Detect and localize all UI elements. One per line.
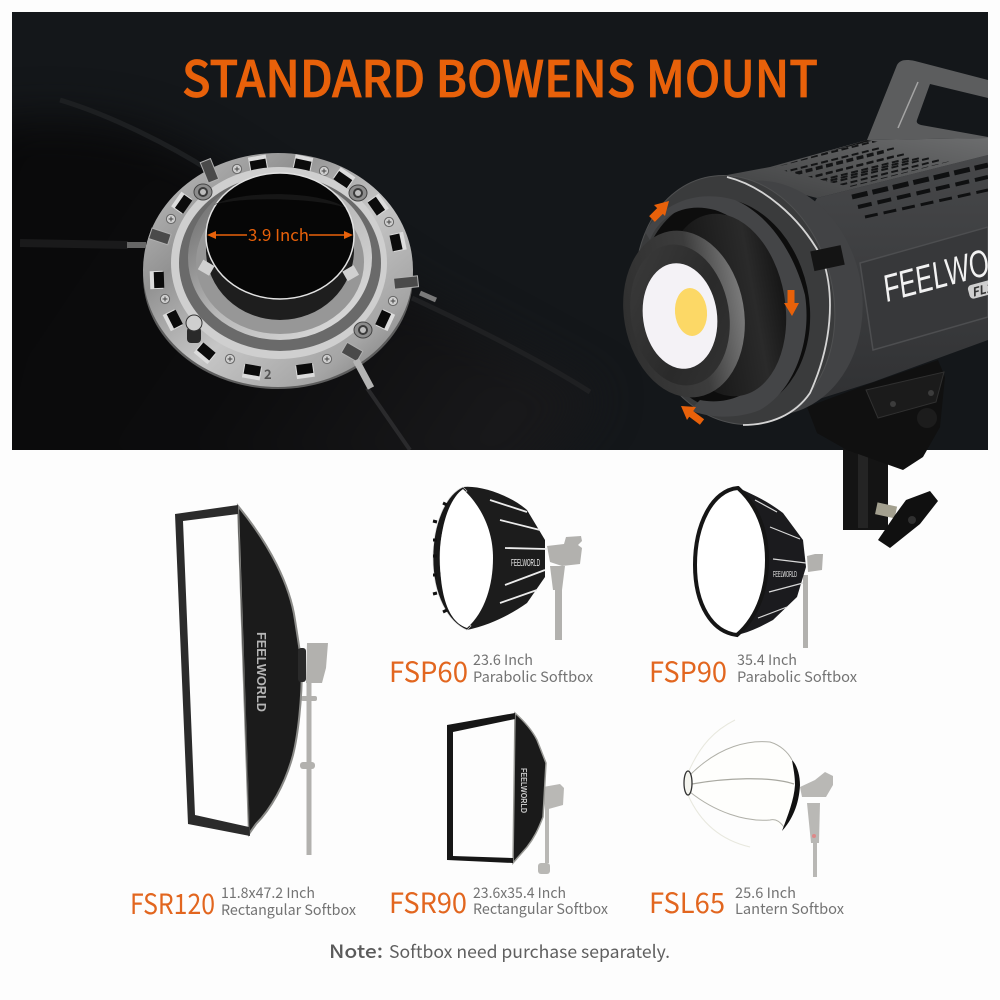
reflector dome: [682, 214, 786, 396]
LED yellow chip: [675, 288, 708, 336]
rim: [695, 488, 767, 635]
locking knob: [186, 315, 202, 343]
inner gap: [654, 202, 810, 402]
label: FSP90: Parabolic Softbox: [737, 666, 857, 687]
collar: [760, 184, 862, 414]
model badge: [968, 280, 988, 299]
speedring mount photo: [127, 153, 436, 389]
softbox: FSP90: FEELWORLD: [773, 569, 797, 579]
mount ring: [638, 175, 836, 425]
softbox: FSP60: [433, 487, 582, 640]
front ring: [684, 771, 692, 795]
label: FSP60: Parabolic Softbox: [473, 666, 593, 687]
label: FSL65: [649, 882, 844, 922]
tilt lever: [875, 491, 938, 548]
body: [238, 506, 302, 834]
LED white reflector: [642, 263, 718, 369]
softbox: FSR120: [175, 505, 328, 855]
note: Softbox need purchase separately.: [389, 939, 670, 964]
dimension: 3.9 inch: 3.9 Inch: [248, 222, 309, 246]
label: FSR120: Rectangular Softbox: [221, 899, 356, 920]
label: FSR120: 11.8x47.2 Inch: [221, 882, 315, 903]
label: FSL65: 25.6 Inch: [735, 882, 796, 903]
label: FSR90: Rectangular Softbox: [473, 898, 608, 919]
ring number: 2: [264, 364, 272, 383]
lantern shell: [690, 742, 795, 830]
label: FSP90: 35.4 Inch: [737, 649, 797, 670]
label: FSP60: [389, 649, 593, 691]
ribs: [755, 500, 806, 618]
title: STANDARD BOWENS MOUNT: [182, 40, 818, 112]
label: FSR120: [130, 882, 356, 923]
tabs: [198, 260, 215, 276]
label: FSL65: FSL65: [649, 882, 725, 922]
central opening: [206, 173, 354, 299]
softbox fabric backdrop: [12, 98, 591, 450]
rim: [645, 196, 807, 417]
clip: [810, 245, 845, 271]
logo: FEELWORLD: [519, 768, 528, 813]
body: [513, 713, 546, 863]
LED light photo: [609, 60, 1000, 548]
arrow: right down: [784, 290, 799, 316]
model badge: FL1: [970, 279, 994, 301]
label: FSR120: FSR120: [130, 883, 215, 923]
arrow: bottom: [681, 406, 702, 422]
dimension: 3.9 inch: [207, 222, 353, 246]
label: FSR90: 23.6x35.4 Inch: [473, 882, 566, 903]
stand: [300, 643, 328, 855]
inner rings: [171, 167, 387, 359]
brackets: [149, 159, 419, 362]
bracket and spigot: [807, 360, 945, 530]
label: FSP60: 23.6 Inch: [473, 649, 533, 670]
rim: [433, 487, 471, 630]
stand: [538, 784, 564, 874]
front frame: [175, 505, 250, 836]
panel: dark banner: [0, 12, 988, 490]
outer ring: [143, 163, 413, 389]
handle: [867, 60, 988, 140]
arrow: upper left: [652, 201, 669, 219]
label: FSR90: FSR90: [389, 882, 467, 922]
label: FSP90: [649, 649, 857, 691]
softbox: FSL65: [684, 720, 833, 877]
body top: [727, 138, 988, 198]
side vents: [852, 165, 988, 217]
front disc: [623, 230, 745, 398]
label: FSL65: Lantern Softbox: [735, 898, 844, 919]
body: [463, 487, 545, 630]
black collar: [782, 760, 800, 831]
label: FSP60: FSP60: [389, 651, 468, 691]
top vents: [775, 140, 949, 187]
ribs: [490, 500, 547, 603]
stand: [803, 554, 823, 648]
stand: [800, 772, 833, 877]
lantern ribs: [688, 720, 794, 847]
rim tabs: [433, 503, 447, 612]
softbox: FSP90: [695, 488, 823, 648]
label: FSR90: [389, 882, 608, 922]
body: [737, 488, 806, 635]
bolts: [194, 184, 212, 200]
softbox: FSP60: FEELWORLD: [511, 558, 540, 569]
stand: [547, 536, 582, 640]
body side: [815, 155, 988, 398]
ring highlight: [727, 177, 830, 425]
logo: FEELWORLD: [254, 632, 269, 712]
front frame: [447, 713, 515, 863]
note: Note:: [329, 938, 383, 964]
label panel: [860, 227, 988, 350]
label: FSP90: FSP90: [649, 651, 727, 691]
softbox: FSR90: [447, 713, 564, 874]
